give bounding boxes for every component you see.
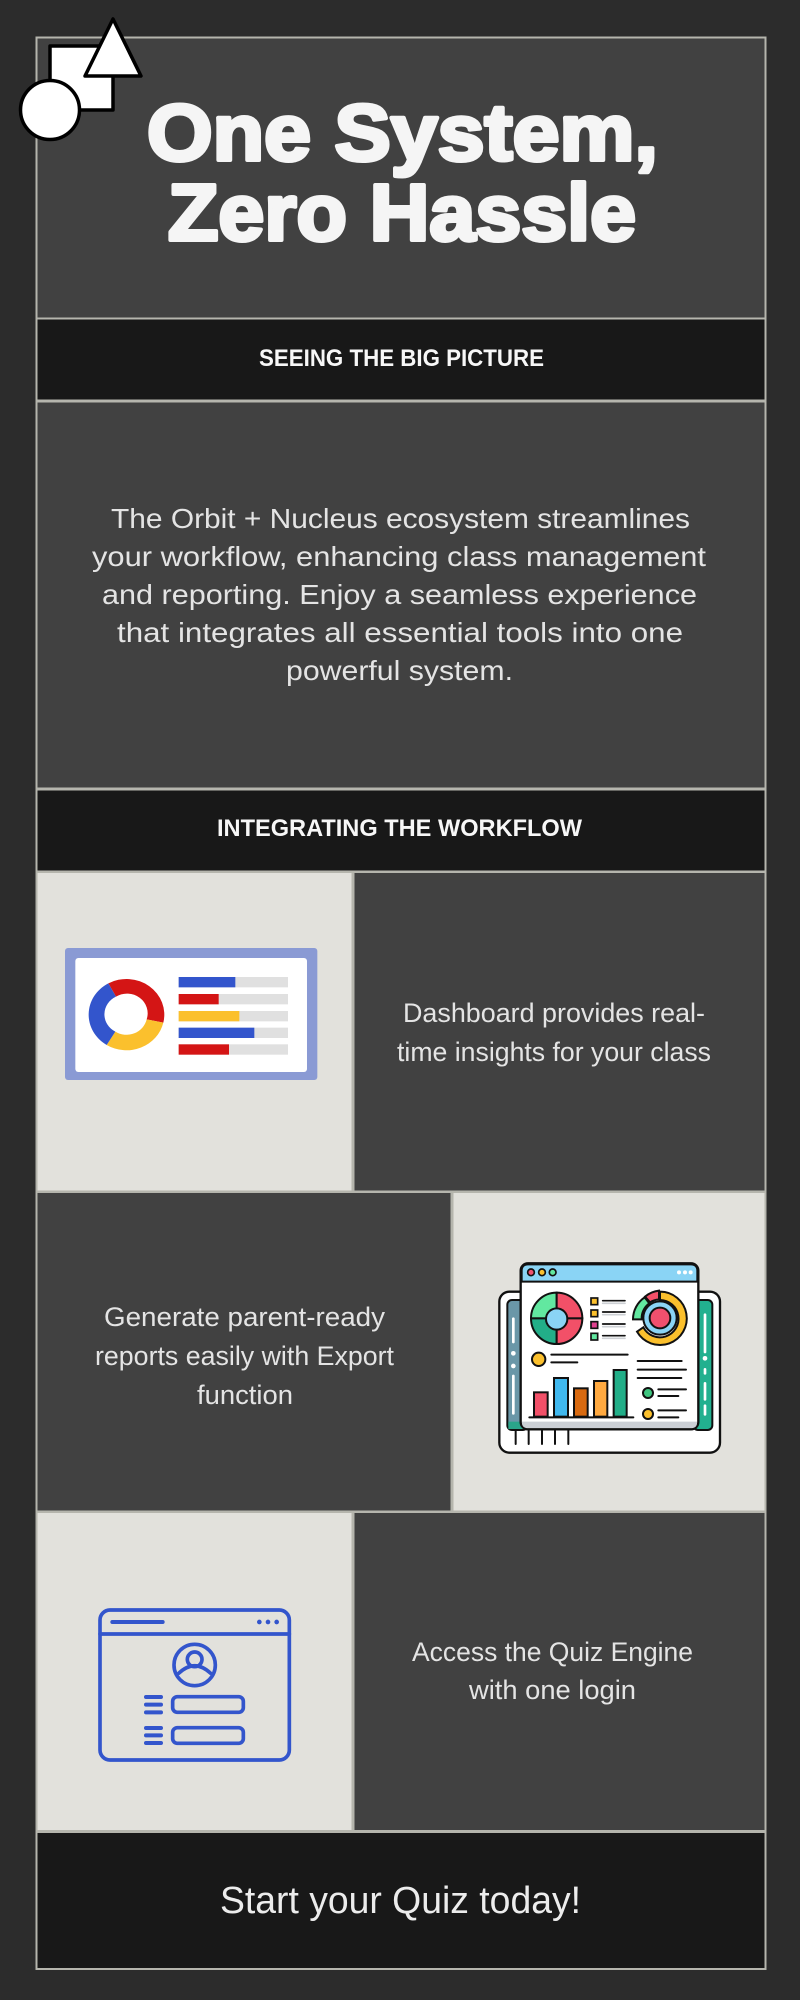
title — [147, 88, 658, 257]
icon: login window — [100, 1610, 289, 1760]
icon: geometric shapes — [20, 19, 141, 140]
text: quiz engine — [412, 1637, 693, 1705]
bar chart — [529, 1370, 633, 1417]
intro text: your workflow, enhancing class management — [92, 541, 706, 572]
text: export: function — [197, 1380, 293, 1410]
title: One System, — [147, 88, 658, 177]
panel: section heading seeing the big picture — [36, 318, 766, 400]
pie chart — [531, 1293, 582, 1344]
panel: section heading integrating the workflow — [36, 790, 766, 872]
text: export: Generate parent-ready — [104, 1302, 386, 1332]
panel: introduction — [36, 402, 766, 788]
intro text: powerful system. — [286, 655, 513, 686]
panel: row 1 dashboard — [36, 872, 766, 1192]
text: export — [95, 1302, 394, 1410]
text: dashboard — [397, 998, 711, 1067]
icon: dashboard with donut and bars — [65, 948, 317, 1080]
intro text: and reporting. Enjoy a seamless experience — [102, 579, 697, 610]
call to action text: Start your Quiz today! — [220, 1880, 581, 1922]
panel: title header — [36, 38, 766, 318]
intro text: that integrates all essential tools into one — [117, 617, 683, 648]
panel: row 3 quiz engine login — [36, 1512, 766, 1831]
heading: INTEGRATING THE WORKFLOW — [217, 815, 582, 842]
text: dashboard: time insights for your class — [397, 1037, 711, 1067]
text: quiz engine: with one login — [468, 1675, 636, 1705]
text: export: reports easily with Export — [95, 1341, 394, 1371]
legend — [591, 1298, 625, 1340]
heading: SEEING THE BIG PICTURE — [259, 345, 544, 372]
icon: colourful report window — [499, 1263, 720, 1453]
intro text: The Orbit + Nucleus ecosystem streamlines — [111, 503, 690, 534]
text: quiz engine: Access the Quiz Engine — [412, 1637, 693, 1667]
title: Zero Hassle — [168, 168, 636, 257]
intro text — [92, 503, 706, 686]
text: dashboard: Dashboard provides real- — [403, 998, 705, 1028]
panel: call to action footer — [36, 1832, 766, 1969]
panel: row 2 export reports — [36, 1192, 766, 1512]
ring chart — [633, 1291, 687, 1345]
